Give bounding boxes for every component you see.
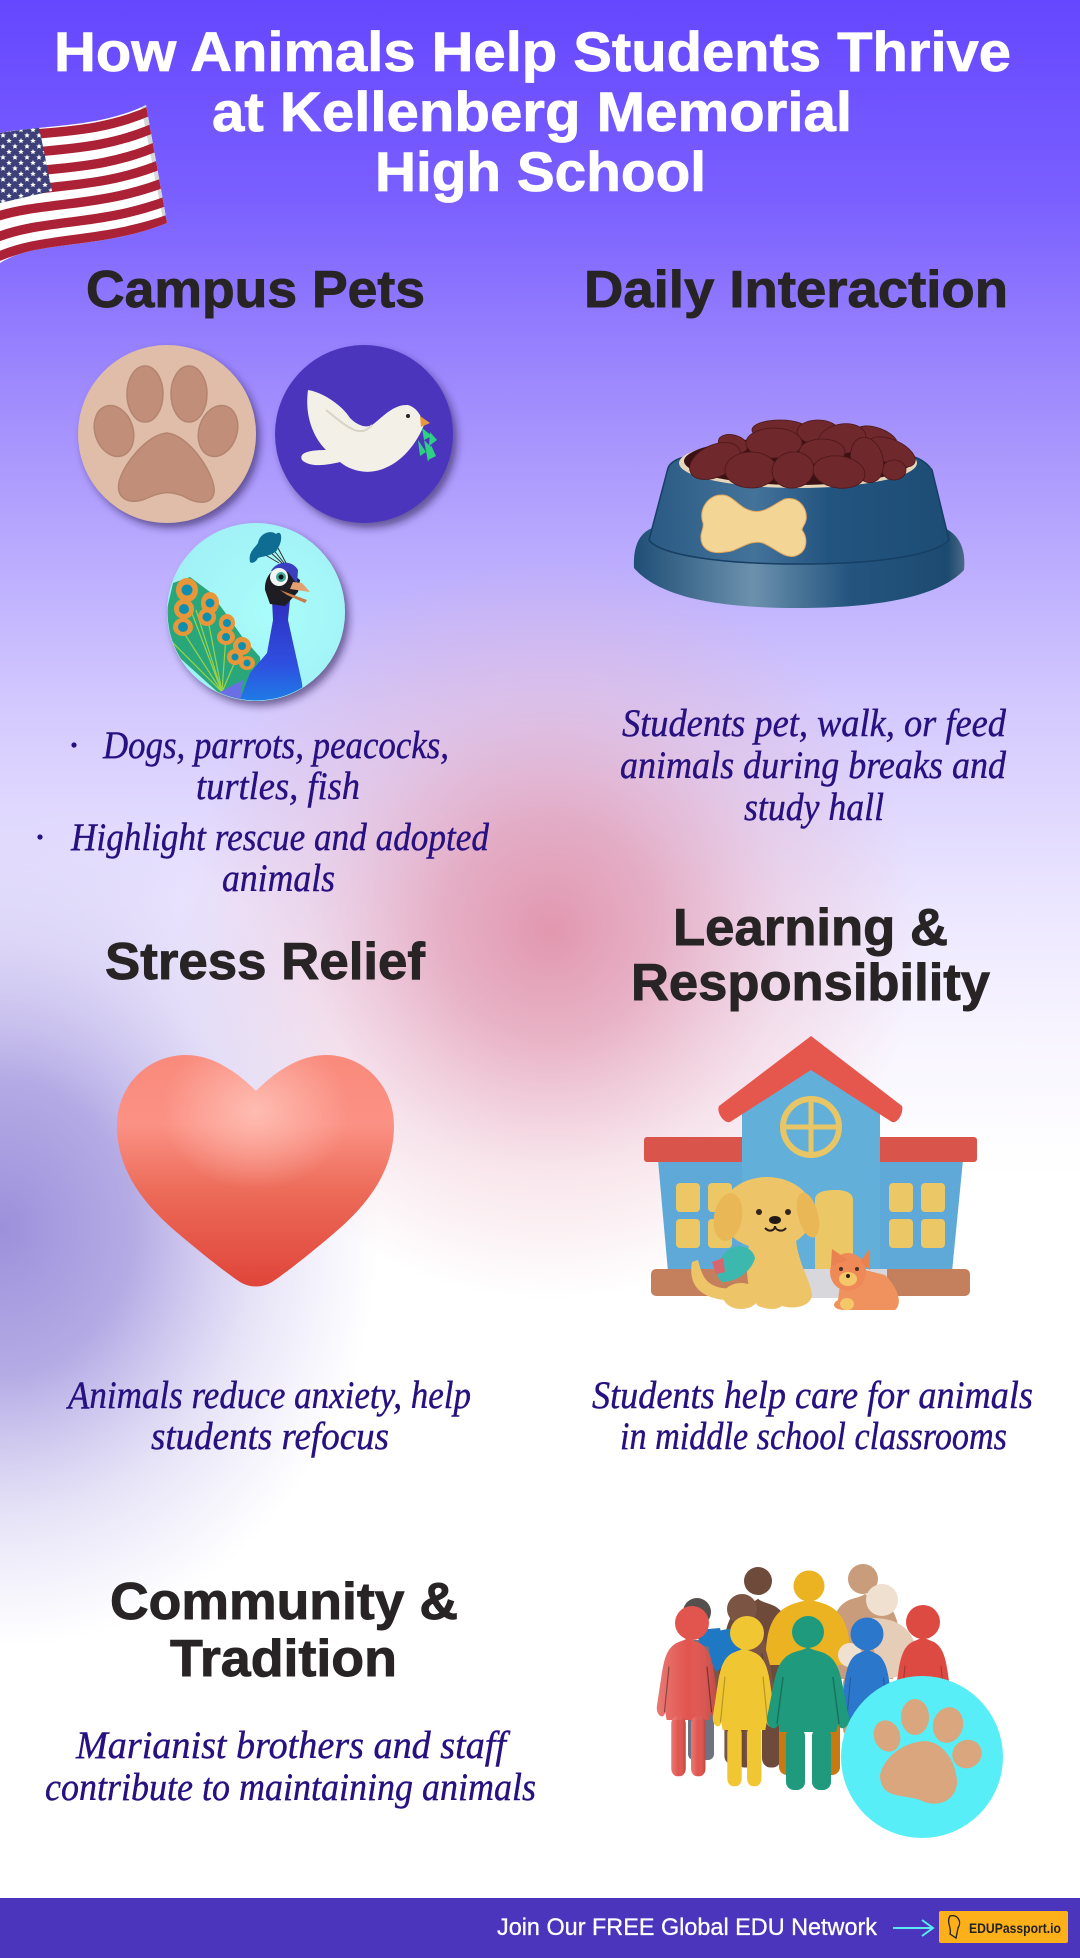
panel: stress relief — [65, 933, 471, 1458]
title: How Animals Help Students Thrive — [54, 20, 1011, 83]
panel: campus pets — [37, 261, 489, 900]
text: daily interaction: animals during breaks and — [620, 744, 1006, 787]
text: daily interaction: Students pet, walk, or feed — [622, 702, 1006, 745]
text: learning and responsibility: Students help care for animals — [592, 1374, 1033, 1417]
text: campus pets bullets: turtles, fish — [196, 765, 360, 808]
panel: community and tradition — [45, 1564, 1003, 1838]
heading: stress relief: Stress Relief — [105, 933, 426, 991]
icon: heart — [117, 1055, 394, 1286]
icon: peacock circle — [160, 523, 345, 705]
icon: pet food bowl — [634, 420, 964, 608]
text: learning and responsibility: in middle school classrooms — [620, 1415, 1007, 1458]
logo: EDUPassport.io: EDUPassport.io — [969, 1920, 1061, 1936]
panel: learning and responsibility — [592, 899, 1033, 1458]
text: campus pets bullets — [37, 724, 489, 900]
logo: EDUPassport.io — [939, 1911, 1068, 1943]
heading: daily interaction: Daily Interaction — [584, 261, 1008, 319]
text: daily interaction: study hall — [744, 786, 884, 829]
arrow — [893, 1920, 933, 1936]
text: stress relief: Animals reduce anxiety, help — [65, 1374, 471, 1417]
icon: paw circle — [78, 345, 256, 523]
title: High School — [375, 140, 706, 203]
text: learning and responsibility — [592, 1374, 1033, 1458]
heading: community and tradition: Community & — [110, 1573, 458, 1631]
icon: school with dog and cat — [644, 1036, 977, 1310]
text: community and tradition: contribute to maintaining animals — [45, 1766, 536, 1809]
text: campus pets bullets: animals — [222, 857, 335, 900]
heading: learning and responsibility: Responsibility — [631, 954, 990, 1012]
title — [54, 20, 1011, 203]
text: campus pets bullets: Dogs, parrots, peacocks, — [102, 724, 449, 767]
heading: campus pets: Campus Pets — [86, 261, 425, 319]
icon: dove circle — [275, 345, 453, 523]
text: campus pets bullets: Highlight rescue and adopted — [70, 816, 489, 859]
heading: community and tradition — [110, 1573, 458, 1688]
icon: american flag — [0, 105, 167, 263]
icon: group of people with paw — [657, 1564, 1003, 1838]
heading: learning and responsibility: Learning & — [673, 899, 948, 957]
text: community and tradition: Marianist brothers and staff — [75, 1724, 511, 1767]
footer banner — [0, 1898, 1080, 1958]
text: daily interaction — [620, 702, 1006, 829]
footer call to action: Join Our FREE Global EDU Network — [497, 1914, 878, 1941]
text: stress relief: students refocus — [151, 1415, 389, 1458]
title: at Kellenberg Memorial — [212, 80, 852, 143]
heading: community and tradition: Tradition — [170, 1630, 397, 1688]
text: community and tradition — [45, 1724, 536, 1809]
text: stress relief — [65, 1374, 471, 1458]
panel: daily interaction — [584, 261, 1008, 829]
heading: learning and responsibility — [631, 899, 990, 1012]
